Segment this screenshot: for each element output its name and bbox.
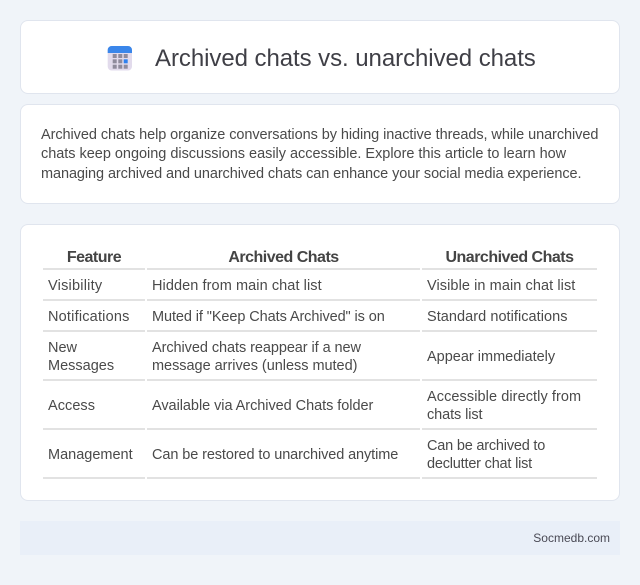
footer credit: Socmedb.com [533, 531, 610, 545]
cell [427, 388, 581, 423]
panel: intro text card [20, 104, 620, 204]
title: Archived chats vs. unarchived chats [155, 45, 536, 72]
cell: Muted if "Keep Chats Archived" is on [152, 309, 385, 325]
row: Management: Management [48, 447, 133, 463]
row: New Messages: New [48, 340, 77, 356]
panel: title card [20, 20, 620, 94]
cell: Visible in main chat list [427, 278, 575, 294]
cell [152, 340, 361, 374]
cell: Accessible directly from [427, 388, 581, 404]
cell: message arrives (unless muted) [152, 358, 357, 374]
cell: Can be archived to [427, 438, 545, 454]
intro paragraph: chats keep ongoing discussions easily accessible. Explore this article to learn how [41, 146, 566, 162]
cell: Available via Archived Chats folder [152, 398, 373, 414]
row: New Messages: Messages [48, 358, 114, 374]
icon: calendar [108, 46, 132, 70]
cell: Can be restored to unarchived anytime [152, 447, 398, 463]
panel: comparison table card [20, 224, 620, 501]
cell: declutter chat list [427, 456, 532, 472]
intro paragraph: Archived chats help organize conversations by hiding inactive threads, while unarchived [41, 126, 598, 142]
intro paragraph: managing archived and unarchived chats can enhance your social media experience. [41, 166, 581, 182]
cell: Hidden from main chat list [152, 278, 322, 294]
row: Notifications: Notifications [48, 309, 130, 325]
cell: Appear immediately [427, 349, 555, 365]
header: Feature: Feature [67, 249, 121, 266]
footer bar [20, 521, 620, 555]
row: Visibility: Visibility [48, 278, 102, 294]
row: New Messages [48, 340, 114, 374]
cell: Archived chats reappear if a new [152, 340, 361, 356]
header: Archived Chats: Archived Chats [228, 249, 339, 266]
header: Unarchived Chats: Unarchived Chats [445, 249, 574, 266]
cell [427, 438, 545, 472]
cell: chats list [427, 407, 482, 423]
cell: Standard notifications [427, 309, 568, 325]
intro paragraph [41, 126, 598, 182]
row: Access: Access [48, 398, 95, 414]
